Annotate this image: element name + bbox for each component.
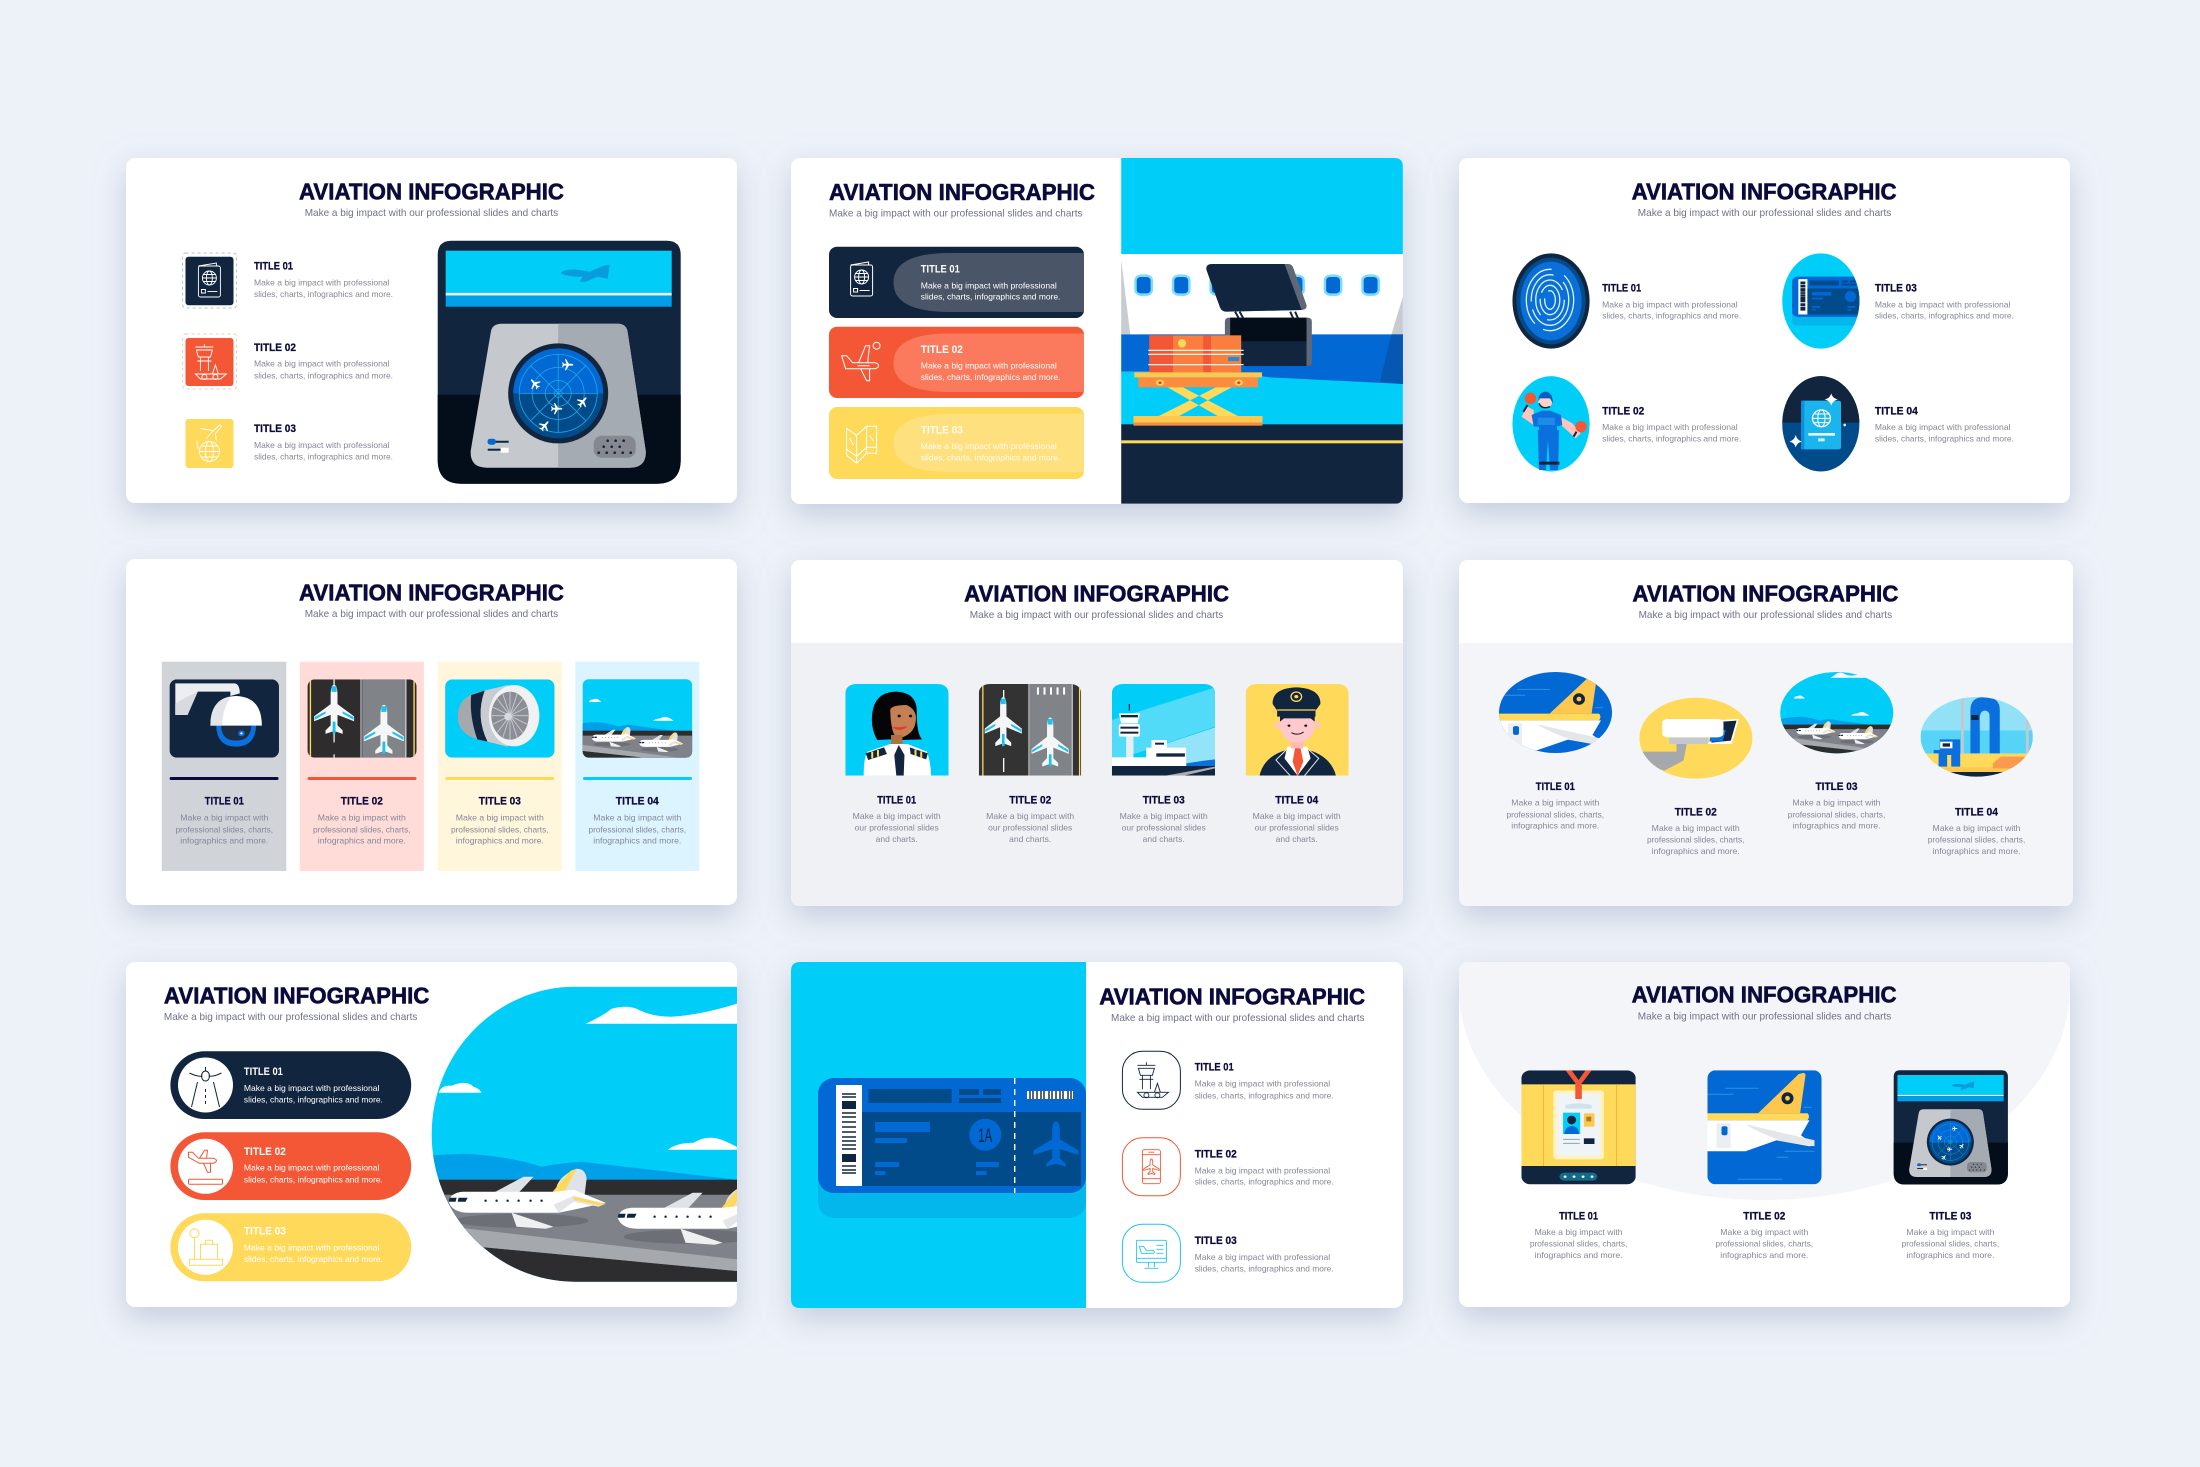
illustration: aircraft cargo door: [1121, 158, 1403, 504]
text block: crew 1: Make a big impact with: [853, 811, 941, 821]
icon: monitor outline: [1122, 1224, 1180, 1282]
text block: scene 2: [1647, 806, 1744, 856]
text block: item 1: [1602, 283, 1741, 321]
text block: scene 1: infographics and more.: [1511, 821, 1599, 831]
text block: card 3: professional slides, charts,: [1902, 1239, 1999, 1249]
text block: scene 3: infographics and more.: [1792, 821, 1880, 831]
colored rules: [170, 777, 692, 780]
box: item 3: [829, 407, 1084, 479]
text block: card 1: infographics and more.: [1535, 1250, 1623, 1260]
title: AVIATION INFOGRAPHIC: [299, 580, 564, 606]
text block: crew 1: [853, 794, 941, 844]
card background: [791, 560, 1403, 906]
text block: item 3: TITLE 03: [254, 423, 296, 435]
illustration: runway: [979, 684, 1081, 776]
panel: slide 7 pills: [126, 962, 872, 1307]
text block: item 4: slides, charts, infographics and more.: [1875, 433, 2014, 443]
text block: column 3: [451, 796, 549, 846]
text block: column 1: TITLE 01: [205, 796, 244, 808]
text block: scene 3: professional slides, charts,: [1788, 809, 1885, 819]
icon: passport tile: [183, 253, 236, 308]
text block: item 3: Make a big impact with professional: [254, 440, 390, 450]
pill: item 2: [170, 1132, 411, 1200]
panel: slide 2 cargo: [791, 158, 1403, 504]
illustration: security gate circle: [1921, 697, 2033, 777]
text block: card 2: Make a big impact with: [1720, 1227, 1809, 1237]
text block: item 2: slides, charts, infographics and more.: [1602, 433, 1741, 443]
panel: slide 9 three cards: [1459, 962, 2070, 1307]
text block: card 1: professional slides, charts,: [1530, 1239, 1627, 1249]
icon: globe tile: [186, 419, 234, 468]
text block: item 2: [1602, 405, 1741, 443]
text block: item 4: TITLE 04: [1875, 405, 1918, 417]
panel: slide 4 columns: [126, 559, 737, 905]
text block: crew 2: Make a big impact with: [986, 811, 1075, 821]
illustration: ID badge: [1521, 1070, 1636, 1184]
box: item 1: [829, 247, 1084, 318]
text block: card 2: [1716, 1210, 1813, 1260]
pill: item 3: slides, charts, infographics and more.: [244, 1254, 383, 1264]
illustration: boarding pass: [818, 1078, 1086, 1218]
text block: item 1: slides, charts, infographics and more.: [1602, 311, 1741, 321]
text block: scene 1: Make a big impact with: [1511, 798, 1600, 808]
text block: item 3: slides, charts, infographics and more.: [254, 452, 393, 462]
subtitle: Make a big impact with our professional slides and charts: [829, 208, 1082, 220]
title: AVIATION INFOGRAPHIC: [1099, 983, 1365, 1009]
illustration: mini radar console: [1894, 1070, 2008, 1185]
pill: item 1: slides, charts, infographics and more.: [244, 1095, 383, 1105]
text block: column 3: professional slides, charts,: [451, 824, 549, 834]
text block: item 4: Make a big impact with professional: [1875, 422, 2011, 432]
illustration: CCTV circle: [1639, 698, 1752, 779]
illustration: control tower and terminal: [1112, 684, 1215, 776]
text block: scene 3: TITLE 03: [1816, 781, 1858, 793]
illustration: airport circle: [1780, 672, 1894, 754]
title: AVIATION INFOGRAPHIC: [164, 982, 429, 1008]
illustration: airport semicircle: [432, 986, 737, 1282]
text block: scene 1: [1507, 781, 1604, 831]
text block: item 2: TITLE 02: [254, 342, 296, 354]
text block: column 3: Make a big impact with: [456, 813, 544, 823]
card background: [1459, 560, 2073, 906]
text block: item 1: Make a big impact with professional: [1602, 299, 1738, 309]
text block: column 1: professional slides, charts,: [176, 824, 273, 834]
box: item 3: Make a big impact with professional: [921, 441, 1057, 451]
box: item 2: slides, charts, infographics and more.: [921, 372, 1060, 382]
text block: scene 1: professional slides, charts,: [1507, 809, 1604, 819]
text block: card 2: professional slides, charts,: [1716, 1239, 1813, 1249]
text block: crew 2: and charts.: [1009, 834, 1051, 844]
text block: item 3: Make a big impact with professional: [1195, 1252, 1330, 1262]
text block: column 3: infographics and more.: [456, 836, 544, 846]
text block: crew 4: our professional slides: [1255, 823, 1339, 833]
text block: item 1: Make a big impact with professional: [254, 278, 390, 288]
text block: item 3: Make a big impact with professional: [1875, 299, 2011, 309]
pill: item 3: [170, 1213, 411, 1281]
illustration: security camera: [170, 679, 279, 758]
text block: crew 4: TITLE 04: [1275, 794, 1318, 806]
text block: crew 2: TITLE 02: [1009, 794, 1051, 806]
illustration: plane tail: [1708, 1070, 1822, 1184]
card background: [791, 158, 1403, 504]
illustration: radar console: [438, 241, 681, 484]
text block: crew 3: our professional slides: [1122, 823, 1206, 833]
illustration: captain: [1246, 684, 1349, 776]
text block: column 2: TITLE 02: [341, 796, 383, 808]
text block: item 3: slides, charts, infographics and more.: [1195, 1264, 1334, 1274]
text block: scene 3: [1788, 781, 1885, 831]
text block: item 2: TITLE 02: [1602, 405, 1644, 417]
text block: column 2: infographics and more.: [318, 836, 406, 846]
text block: card 3: [1902, 1210, 1999, 1260]
box: item 2: TITLE 02: [921, 344, 963, 356]
panel: slide 8 boarding pass: [791, 962, 1403, 1308]
arc background: [1459, 962, 2070, 1200]
illustration: female pilot: [845, 684, 949, 776]
text block: column 2: [313, 796, 411, 846]
text block: crew 4: and charts.: [1276, 834, 1318, 844]
text block: card 2: infographics and more.: [1720, 1250, 1808, 1260]
title: AVIATION INFOGRAPHIC: [1632, 581, 1898, 607]
illustration: jet engine: [445, 679, 554, 758]
text block: column 1: Make a big impact with: [180, 813, 269, 823]
text block: crew 3: and charts.: [1143, 834, 1185, 844]
text block: scene 4: [1928, 806, 2025, 856]
text block: item 1: slides, charts, infographics and more.: [254, 289, 393, 299]
text block: card 3: infographics and more.: [1906, 1250, 1994, 1260]
text block: column 1: infographics and more.: [180, 836, 268, 846]
text block: item 2: slides, charts, infographics and more.: [1195, 1177, 1334, 1187]
text block: crew 2: [986, 794, 1075, 844]
text block: item 1: TITLE 01: [1195, 1062, 1234, 1074]
box: item 3: slides, charts, infographics and more.: [921, 452, 1060, 462]
grey band: [1459, 643, 2073, 906]
text block: card 3: TITLE 03: [1929, 1210, 1971, 1222]
title: AVIATION INFOGRAPHIC: [829, 179, 1095, 205]
icon: tower outline: [1122, 1051, 1180, 1109]
text block: crew 1: and charts.: [876, 834, 918, 844]
text block: scene 4: professional slides, charts,: [1928, 835, 2025, 845]
box: item 3: TITLE 03: [921, 424, 963, 436]
pill: item 2: slides, charts, infographics and more.: [244, 1174, 383, 1184]
text block: column 1: [176, 796, 273, 846]
title: AVIATION INFOGRAPHIC: [964, 581, 1229, 607]
text block: crew 4: [1253, 794, 1341, 844]
text block: item 4: [1875, 405, 2014, 443]
box: item 1: TITLE 01: [921, 263, 960, 275]
column backgrounds: [162, 662, 699, 871]
subtitle: Make a big impact with our professional slides and charts: [305, 207, 558, 219]
text block: column 4: professional slides, charts,: [589, 824, 686, 834]
panel: slide 5 crew: [791, 560, 1403, 906]
text block: item 2: TITLE 02: [1195, 1148, 1237, 1160]
text block: crew 4: Make a big impact with: [1253, 811, 1341, 821]
title: AVIATION INFOGRAPHIC: [299, 178, 564, 204]
pill: item 1: TITLE 01: [244, 1066, 283, 1078]
text block: scene 4: TITLE 04: [1955, 806, 1998, 818]
pill: item 1: [170, 1051, 411, 1119]
text block: scene 3: Make a big impact with: [1792, 798, 1881, 808]
text block: column 3: TITLE 03: [479, 796, 521, 808]
text block: item 1: Make a big impact with professional: [1195, 1079, 1330, 1089]
card background: [1459, 962, 2070, 1307]
subtitle: Make a big impact with our professional slides and charts: [1111, 1012, 1364, 1024]
card background: [126, 962, 737, 1307]
text block: column 2: Make a big impact with: [318, 813, 406, 823]
text block: item 1: [254, 260, 393, 299]
title: AVIATION INFOGRAPHIC: [1632, 178, 1897, 204]
text block: scene 4: Make a big impact with: [1932, 823, 2021, 833]
text block: crew 1: TITLE 01: [877, 794, 916, 806]
illustration: runway from above: [308, 679, 417, 758]
text block: card 1: Make a big impact with: [1535, 1227, 1623, 1237]
text block: column 4: infographics and more.: [593, 836, 681, 846]
illustration: passport oval: [1782, 376, 1860, 471]
subtitle: Make a big impact with our professional slides and charts: [970, 609, 1223, 621]
text block: item 1: TITLE 01: [254, 260, 293, 272]
box: item 1: Make a big impact with professional: [921, 280, 1057, 290]
subtitle: Make a big impact with our professional slides and charts: [1638, 1010, 1891, 1022]
subtitle: Make a big impact with our professional slides and charts: [164, 1011, 417, 1023]
icon: tower tile: [183, 334, 236, 389]
text block: scene 2: Make a big impact with: [1652, 823, 1740, 833]
text block: card 1: [1530, 1210, 1627, 1260]
text block: column 4: Make a big impact with: [593, 813, 682, 823]
panel: slide 1 radar: [126, 158, 737, 503]
text block: column 4: [589, 796, 686, 846]
illustration: fingerprint: [1512, 253, 1590, 349]
card background: [791, 962, 1403, 1308]
panel: slide 6 round scenes: [1459, 560, 2073, 906]
text block: item 3: [1875, 283, 2014, 321]
subtitle: Make a big impact with our professional slides and charts: [1638, 207, 1891, 219]
text block: item 1: TITLE 01: [1602, 283, 1641, 295]
pill: item 2: TITLE 02: [244, 1146, 286, 1158]
text block: item 1: slides, charts, infographics and more.: [1195, 1090, 1334, 1100]
text block: crew 3: [1120, 794, 1208, 844]
text block: item 2: [1195, 1148, 1334, 1187]
pill: item 3: TITLE 03: [244, 1226, 286, 1238]
text block: item 3: slides, charts, infographics and more.: [1875, 311, 2014, 321]
text block: item 3: TITLE 03: [1875, 283, 1917, 295]
ticket seat number: 1A: [978, 1126, 992, 1147]
icon: phone outline: [1122, 1138, 1180, 1196]
cyan panel with ticket: [791, 962, 1086, 1308]
text block: scene 2: professional slides, charts,: [1647, 835, 1744, 845]
illustration: plane tail circle: [1499, 672, 1612, 753]
text block: item 2: Make a big impact with professional: [1602, 422, 1738, 432]
card background: [126, 559, 737, 905]
text block: crew 3: Make a big impact with: [1120, 811, 1208, 821]
text block: scene 2: TITLE 02: [1675, 806, 1717, 818]
text block: card 2: TITLE 02: [1743, 1210, 1785, 1222]
pill: item 2: Make a big impact with professional: [244, 1163, 380, 1173]
text block: crew 1: our professional slides: [855, 823, 939, 833]
subtitle: Make a big impact with our professional slides and charts: [305, 608, 558, 620]
illustration: ground marshaller: [1512, 376, 1590, 471]
illustration: airport with two planes: [582, 679, 692, 758]
box: item 2: [829, 327, 1084, 398]
text block: scene 4: infographics and more.: [1932, 846, 2020, 856]
text block: column 2: professional slides, charts,: [313, 824, 411, 834]
text block: item 3: TITLE 03: [1195, 1235, 1237, 1247]
text block: item 3: [1195, 1235, 1334, 1274]
text block: item 3: [254, 423, 393, 462]
text block: item 2: Make a big impact with professional: [1195, 1165, 1330, 1175]
illustration: boarding pass oval: [1782, 253, 1860, 349]
text block: crew 3: TITLE 03: [1143, 794, 1185, 806]
card background: [1459, 158, 2070, 503]
panel: slide 3 ovals: [1459, 158, 2070, 503]
pill: item 1: Make a big impact with professional: [244, 1083, 380, 1093]
text block: crew 2: our professional slides: [988, 823, 1072, 833]
text block: scene 2: infographics and more.: [1652, 846, 1740, 856]
text block: column 4: TITLE 04: [616, 796, 659, 808]
text block: item 2: [254, 342, 393, 380]
text block: item 1: [1195, 1062, 1334, 1100]
title: AVIATION INFOGRAPHIC: [1632, 982, 1897, 1008]
card background: [126, 158, 737, 503]
text block: item 2: slides, charts, infographics and more.: [254, 370, 393, 380]
pill: item 3: Make a big impact with professional: [244, 1242, 380, 1252]
box: item 1: slides, charts, infographics and more.: [921, 292, 1060, 302]
text block: card 3: Make a big impact with: [1906, 1227, 1995, 1237]
text block: card 1: TITLE 01: [1559, 1210, 1598, 1222]
box: item 2: Make a big impact with professional: [921, 361, 1057, 371]
text block: scene 1: TITLE 01: [1536, 781, 1575, 793]
text block: item 2: Make a big impact with professional: [254, 359, 390, 369]
subtitle: Make a big impact with our professional slides and charts: [1639, 609, 1892, 621]
grey band: [791, 643, 1403, 906]
